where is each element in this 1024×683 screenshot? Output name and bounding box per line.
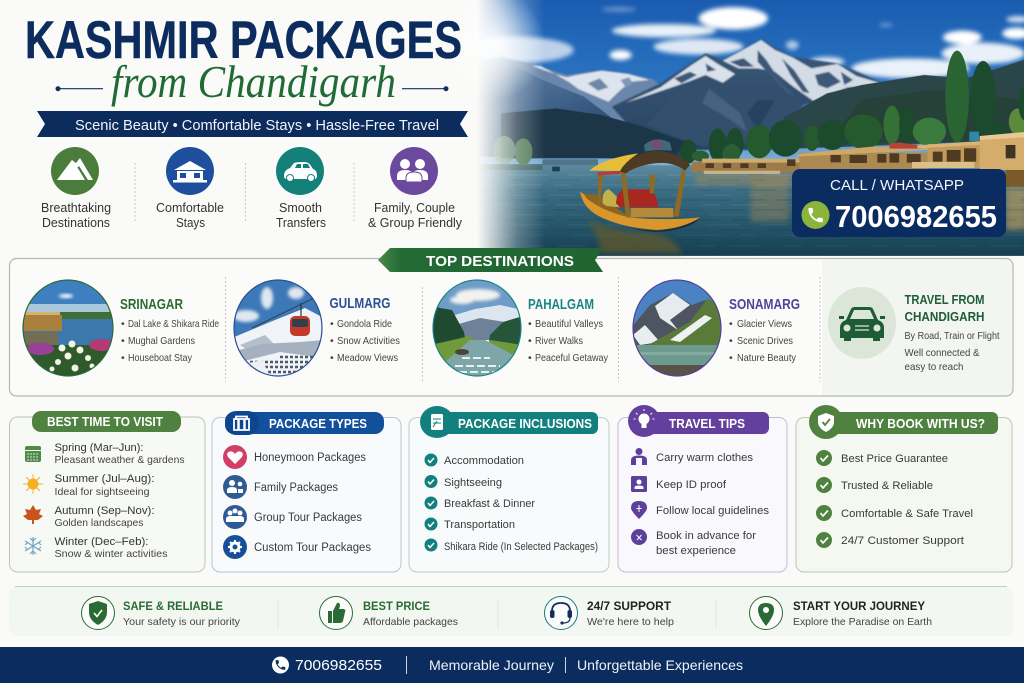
item: family packages: Family Packages <box>254 482 338 494</box>
photo: Pahalgam <box>431 278 523 380</box>
heading: why book with us: WHY BOOK WITH US? <box>856 417 985 431</box>
feature: Breathtaking Destinations: Breathtaking <box>41 201 111 215</box>
panel: package types <box>212 411 401 572</box>
text: Pahalgam <box>528 296 609 364</box>
item: start your journey <box>750 596 932 630</box>
text: summer: Ideal for sightseeing <box>54 486 150 498</box>
heading: why book with us <box>809 405 998 439</box>
item: best price: Affordable packages <box>363 616 458 628</box>
icon: maple leaf <box>23 505 43 524</box>
footer bar: 7006982655 <box>295 657 382 674</box>
lake water <box>470 165 1024 256</box>
text: Gulmarg: Gondola Ride <box>337 318 392 330</box>
heading: best time to visit <box>32 411 181 432</box>
checklist: inclusions: Transportation <box>444 519 515 531</box>
item: support: We're here to help <box>587 616 674 628</box>
icon: WhatsApp phone <box>802 201 830 229</box>
text: Pahalgam: River Walks <box>535 335 583 347</box>
feature: Smooth Transfers <box>276 147 326 230</box>
right dark hill <box>758 60 1024 150</box>
call / WhatsApp box: CALL / WHATSAPP <box>830 177 964 194</box>
far left snowy range <box>499 58 659 122</box>
tip: warm clothes: Carry warm clothes <box>656 452 754 464</box>
text: Pahalgam: Peaceful Getaway <box>535 352 609 364</box>
item: best price <box>320 596 458 630</box>
heading: travel tips: TRAVEL TIPS <box>669 417 745 431</box>
feature: Comfortable Stays: Stays <box>176 216 205 230</box>
photo: Sonamarg <box>631 278 723 379</box>
feature: Breathtaking Destinations: Destinations <box>42 216 110 230</box>
item: honeymoon packages: Honeymoon Packages <box>254 452 366 464</box>
panel: best time to visit <box>10 411 205 572</box>
feature: Family, Couple and Group Friendly: & Group Friendly <box>368 216 463 230</box>
icon: sun <box>23 474 43 494</box>
main snow-capped peak <box>612 39 889 150</box>
left blue hillside <box>483 69 681 157</box>
checklist: inclusions <box>424 454 598 553</box>
text: Sonamarg: Scenic Drives <box>737 335 793 347</box>
text: Pahalgam: • <box>528 318 532 330</box>
text: autumn: Autumn (Sep–Nov): <box>54 505 154 517</box>
text: Sonamarg: Glacier Views <box>737 318 792 330</box>
tip: ID proof: Keep ID proof <box>656 479 727 491</box>
photo fade to white <box>445 0 546 256</box>
assurance strip <box>9 586 1013 636</box>
heading: package inclusions <box>420 406 598 438</box>
text: Srinagar: • <box>121 335 125 347</box>
text: travel from Chandigarh: easy to reach <box>904 361 964 373</box>
text: Sonamarg <box>729 296 800 364</box>
checklist: inclusions: Sightseeing <box>444 477 502 489</box>
panel: top destinations <box>10 248 1013 396</box>
text: winter: Winter (Dec–Feb): <box>54 536 148 548</box>
feature: Smooth Transfers: Smooth <box>279 201 322 215</box>
item: group tour packages <box>223 505 362 529</box>
text: autumn <box>54 505 154 529</box>
feature: Smooth Transfers: Transfers <box>276 216 326 230</box>
checklist: inclusions: Breakfast & Dinner <box>444 498 535 510</box>
hero photo: Dal Lake and mountains <box>456 0 1024 256</box>
tagline ribbon: Scenic Beauty • Comfortable Stays • Hassle-Free Travel <box>75 117 439 134</box>
item: start your journey: START YOUR JOURNEY <box>793 601 925 613</box>
tip: warm clothes <box>631 448 754 465</box>
text: travel from Chandigarh: By Road, Train or Flight <box>904 330 1000 342</box>
item: support <box>544 596 674 630</box>
panel: travel tips <box>618 405 787 572</box>
text: Sonamarg: SONAMARG <box>729 296 800 313</box>
tip: ID proof <box>631 476 727 492</box>
item: safe and reliable: SAFE & RELIABLE <box>123 601 223 613</box>
subtitle: from Chandigarh: from Chandigarh <box>111 56 396 107</box>
tagline ribbon <box>37 111 468 137</box>
text: Pahalgam: Beautiful Valleys <box>535 318 603 330</box>
footer bar <box>0 647 1024 683</box>
text: Srinagar <box>120 296 219 364</box>
item: family packages <box>223 475 338 499</box>
text: Gulmarg <box>330 295 400 364</box>
text: Srinagar: SRINAGAR <box>120 296 183 313</box>
photo: Srinagar <box>20 278 116 380</box>
icon: car <box>828 287 896 359</box>
icon: snowflake <box>25 537 41 555</box>
text: Sonamarg: Nature Beauty <box>737 352 797 364</box>
lake ripples <box>470 175 1024 252</box>
text: spring: Pleasant weather & gardens <box>54 454 184 466</box>
heading: best time to visit: BEST TIME TO VISIT <box>47 415 163 429</box>
text: Srinagar: Houseboat Stay <box>128 352 193 364</box>
text: Gulmarg: Snow Activities <box>337 335 400 347</box>
text: travel from Chandigarh: Well connected & <box>904 347 980 359</box>
heading: package types <box>225 411 384 435</box>
heading: package types: PACKAGE TYPES <box>269 417 367 431</box>
text: Gulmarg: Meadow Views <box>337 352 398 364</box>
text: Gulmarg: • <box>330 318 334 330</box>
heading: travel tips <box>628 405 769 437</box>
text: summer: Summer (Jul–Aug): <box>54 473 154 485</box>
feature: Family, Couple and Group Friendly <box>368 147 463 230</box>
row of houseboats <box>692 132 1024 187</box>
title: KASHMIR PACKAGES <box>25 11 462 70</box>
checklist: inclusions: Accommodation <box>444 455 524 467</box>
text: autumn: Golden landscapes <box>54 517 144 529</box>
tip: book in advance <box>631 529 756 557</box>
text: winter <box>54 536 168 560</box>
panel: why book with us <box>796 405 1012 572</box>
heading ribbon: top destinations <box>378 248 603 272</box>
footer bar: Unforgettable Experiences <box>577 657 743 673</box>
text: Srinagar: • <box>121 352 125 364</box>
shoreline trees <box>680 51 1024 164</box>
checklist: why book: Best Price Guarantee <box>841 453 948 465</box>
checklist: why book: 24/7 Customer Support <box>841 535 964 547</box>
tip: local guidelines <box>631 501 770 519</box>
text: spring: Spring (Mar–Jun): <box>54 442 144 454</box>
text: summer <box>54 473 154 498</box>
item: support: 24/7 SUPPORT <box>587 601 671 613</box>
heading ribbon: top destinations: TOP DESTINATIONS <box>426 253 574 270</box>
text: travel from Chandigarh <box>904 292 1000 373</box>
item: group tour packages: Group Tour Packages <box>254 512 362 524</box>
text: Gulmarg: GULMARG <box>330 295 390 312</box>
call / WhatsApp box: 7006982655 <box>835 199 997 234</box>
text: Pahalgam: • <box>528 352 532 364</box>
heading: package inclusions: PACKAGE INCLUSIONS <box>458 417 592 431</box>
item: honeymoon packages <box>223 445 366 469</box>
text: Srinagar: • <box>121 318 125 330</box>
text: travel from Chandigarh: CHANDIGARH <box>904 309 984 324</box>
text: Gulmarg: • <box>330 335 334 347</box>
photo: Gulmarg <box>232 278 324 380</box>
feature: Breathtaking Destinations <box>41 147 111 230</box>
text: Srinagar: Dal Lake & Shikara Ride <box>128 318 219 330</box>
item: custom tour packages <box>223 535 371 559</box>
footer bar: Memorable Journey <box>429 657 554 673</box>
item: safe and reliable: Your safety is our priority <box>123 616 241 628</box>
feature: Comfortable Stays: Comfortable <box>156 201 224 215</box>
text: Sonamarg: • <box>729 352 733 364</box>
icon: calendar <box>25 446 41 462</box>
feature: Comfortable Stays <box>156 147 224 230</box>
item: best price: BEST PRICE <box>363 601 430 613</box>
text: Sonamarg: • <box>729 318 733 330</box>
icon: phone <box>272 656 289 674</box>
checklist: inclusions: Shikara Ride (In Selected Packages) <box>444 541 598 553</box>
text: Pahalgam: • <box>528 335 532 347</box>
item: custom tour packages: Custom Tour Packages <box>254 542 371 554</box>
text: spring <box>54 442 184 466</box>
checklist: why book: Comfortable & Safe Travel <box>841 508 973 520</box>
tip: local guidelines: Follow local guidelines <box>656 505 770 517</box>
checklist: why book: Trusted & Reliable <box>841 480 933 492</box>
text: Gulmarg: • <box>330 352 334 364</box>
text: Pahalgam: PAHALGAM <box>528 296 594 313</box>
text: winter: Snow & winter activities <box>54 548 168 560</box>
item: safe and reliable <box>82 596 241 630</box>
text: Sonamarg: • <box>729 335 733 347</box>
checklist: why book <box>816 450 973 548</box>
distant island trees and boats <box>470 136 598 171</box>
tip: book in advance: best experience <box>656 545 736 557</box>
item: start your journey: Explore the Paradise on Earth <box>793 616 932 628</box>
houseboat reflections <box>695 173 1024 230</box>
call / WhatsApp box <box>792 169 1006 237</box>
text: Srinagar: Mughal Gardens <box>128 335 195 347</box>
panel: package inclusions <box>409 406 609 572</box>
shikara boat <box>580 139 701 253</box>
feature: Family, Couple and Group Friendly: Family, Couple <box>374 201 455 215</box>
text: travel from Chandigarh: TRAVEL FROM <box>904 292 984 307</box>
tip: book in advance: Book in advance for <box>656 530 756 542</box>
